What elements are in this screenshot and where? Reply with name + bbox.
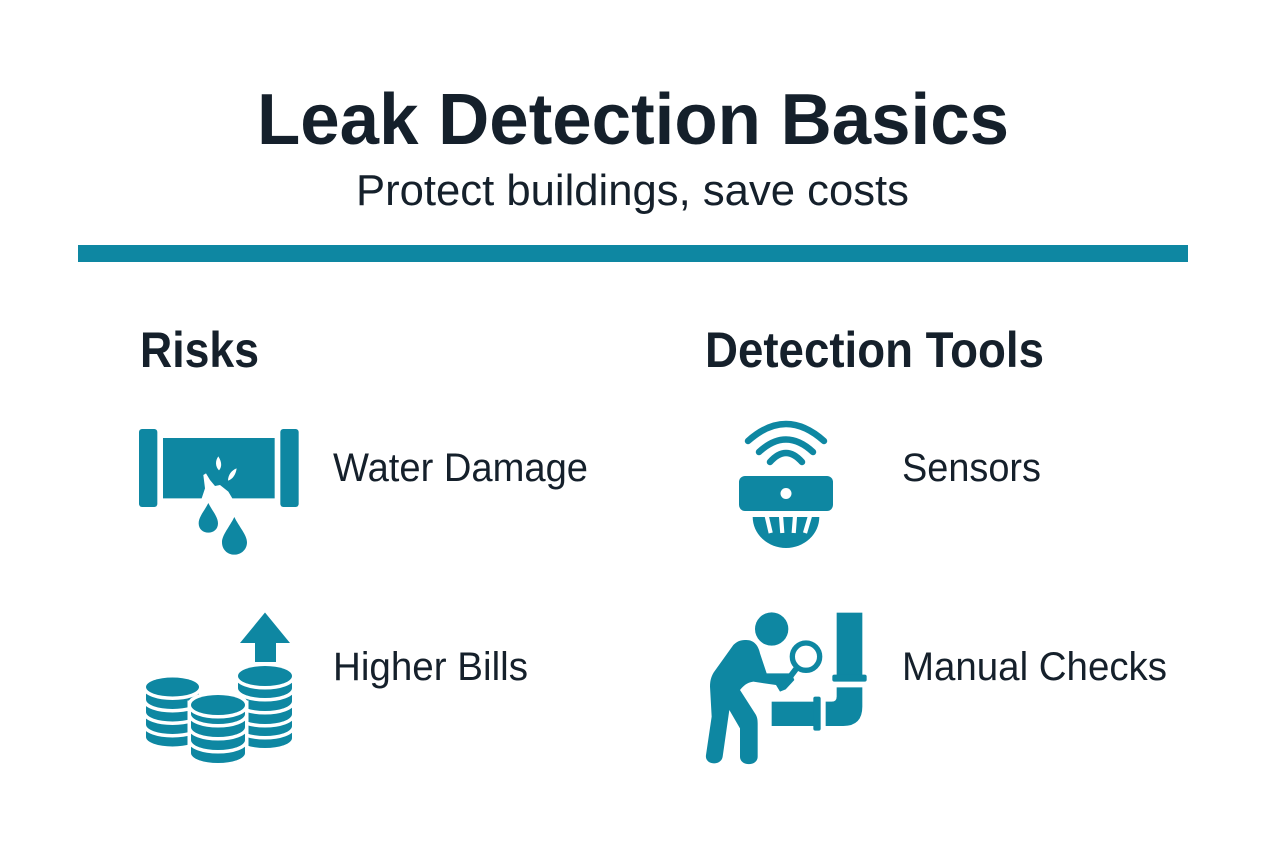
label: sensors: Sensors [902, 446, 1041, 490]
heading: detection tools: Detection Tools [705, 322, 1044, 378]
arrow up [240, 612, 290, 662]
icon: coin stacks with up arrow [146, 612, 292, 763]
icon: leaking pipe [139, 429, 299, 555]
panel: risks [139, 322, 588, 763]
icon: person inspecting pipes with magnifier [706, 612, 867, 764]
subtitle: Protect buildings, save costs [356, 166, 909, 215]
panel: detection tools [705, 322, 1167, 764]
icon: wireless sensor [739, 424, 833, 548]
header divider bar [78, 245, 1188, 262]
title: Leak Detection Basics [257, 79, 1009, 160]
label: water damage: Water Damage [333, 446, 588, 490]
label: higher bills: Higher Bills [333, 645, 528, 689]
label: manual checks: Manual Checks [902, 645, 1167, 689]
heading: risks: Risks [140, 322, 259, 378]
